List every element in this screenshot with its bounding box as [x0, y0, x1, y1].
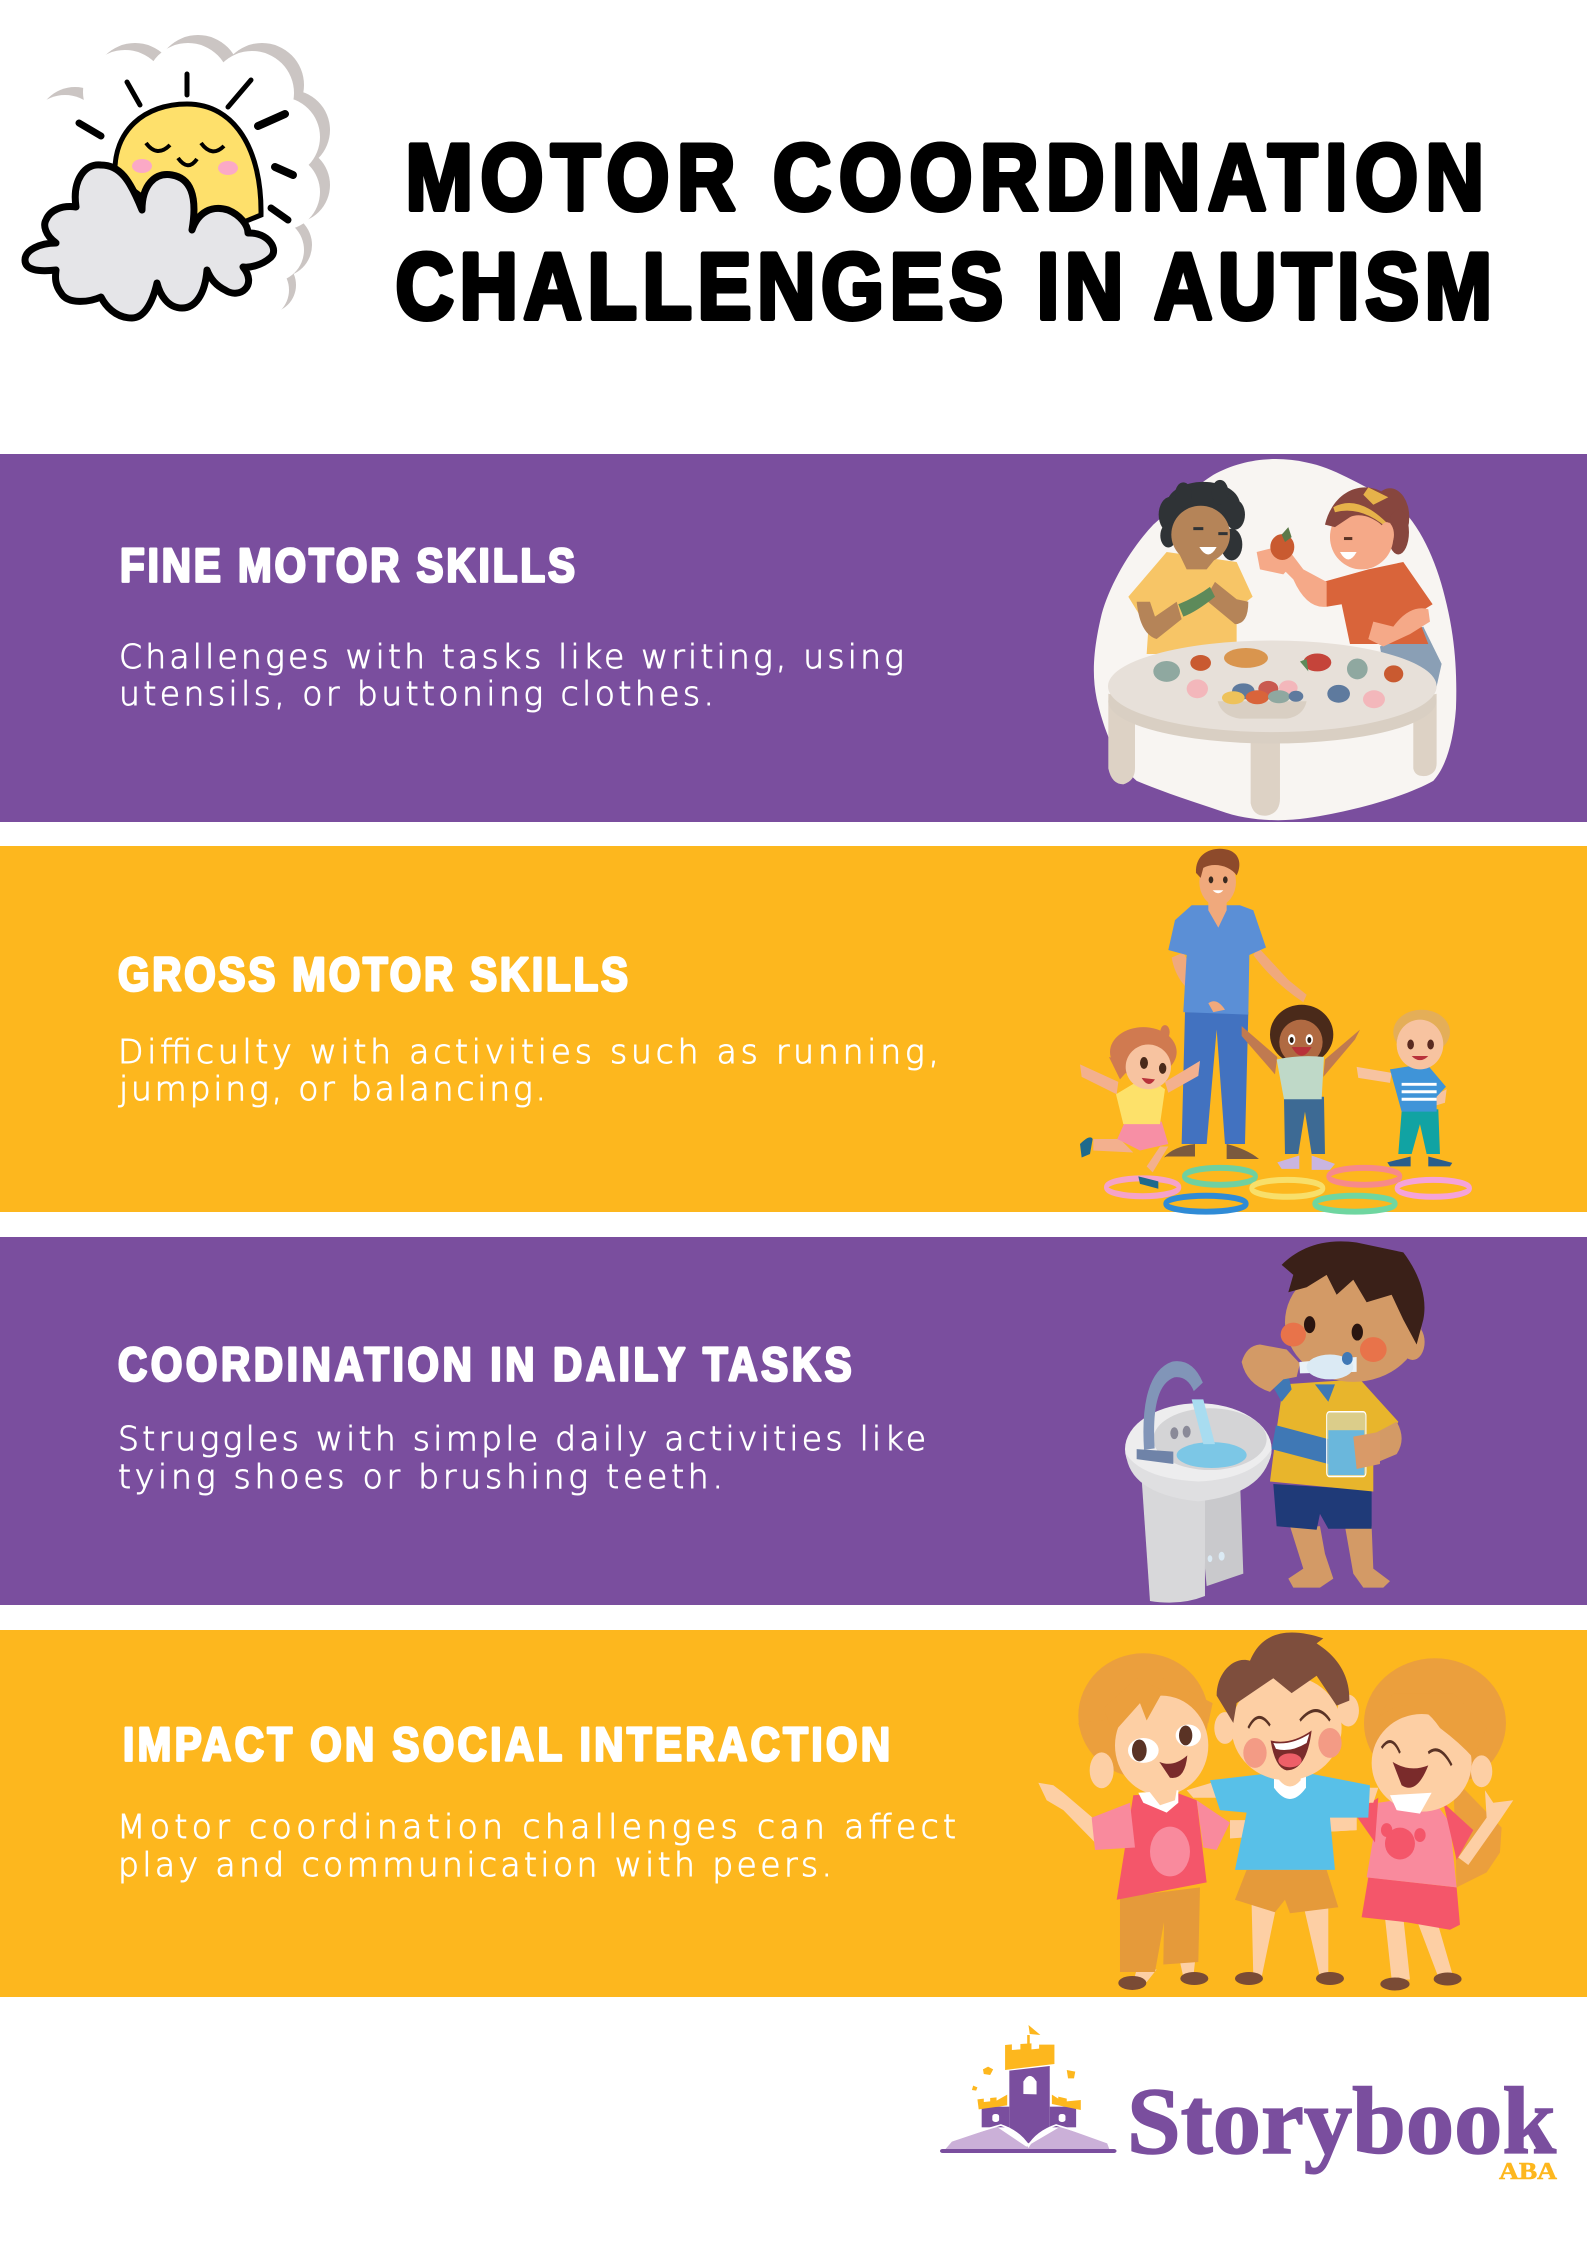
- text block: utensils, or buttoning clothes.: [119, 674, 714, 713]
- therapist: [1164, 849, 1307, 1159]
- icon: sun rays: [79, 74, 293, 220]
- text block: Difficulty with activities such as running,: [118, 1032, 939, 1071]
- child one: [1128, 480, 1253, 654]
- text block: Struggles with simple daily activities like: [118, 1419, 926, 1458]
- clay shapes: [1153, 648, 1403, 719]
- boy with striped shirt: [1357, 1010, 1452, 1166]
- sink: [1125, 1369, 1272, 1603]
- girl in yellow: [1080, 1025, 1200, 1189]
- text block: Challenges with tasks like writing, using: [119, 637, 904, 676]
- illustration: therapist with children and hoops: [1080, 849, 1470, 1212]
- text block: [117, 1807, 956, 1884]
- heading: GROSS MOTOR SKILLS: [118, 949, 628, 1001]
- title: CHALLENGES IN AUTISM: [396, 234, 1492, 339]
- icon: sleepy sun behind cloud sticker: [0, 35, 330, 340]
- text block: Motor coordination challenges can affect: [117, 1807, 956, 1846]
- icon: castle on open book: [940, 2025, 1117, 2153]
- text block: tying shoes or brushing teeth.: [118, 1457, 723, 1496]
- left boy: [1038, 1653, 1230, 1990]
- panel: gross motor skills: [0, 846, 1587, 1212]
- tagline: ABA: [1499, 2159, 1558, 2185]
- wordmark: Storybook: [1127, 2068, 1556, 2174]
- illustration: boy brushing teeth at a sink: [1125, 1241, 1425, 1603]
- panel: impact on social interaction: [0, 1630, 1587, 1997]
- heading: COORDINATION IN DAILY TASKS: [118, 1339, 852, 1391]
- panel: fine motor skills: [0, 454, 1587, 822]
- title: [396, 125, 1492, 339]
- illustration: three happy children: [1038, 1633, 1513, 1990]
- child two: [1257, 487, 1442, 686]
- boy: [1242, 1241, 1425, 1588]
- icon: sun face: [115, 104, 261, 240]
- heading: FINE MOTOR SKILLS: [120, 540, 575, 592]
- middle boy: [1187, 1633, 1378, 1985]
- right girl: [1330, 1658, 1513, 1990]
- logo: Storybook ABA: [940, 2025, 1558, 2185]
- title: MOTOR COORDINATION: [406, 125, 1484, 230]
- girl with curly hair: [1242, 1005, 1360, 1170]
- heading: IMPACT ON SOCIAL INTERACTION: [123, 1719, 890, 1771]
- text block: jumping, or balancing.: [118, 1069, 546, 1108]
- text block: play and communication with peers.: [118, 1845, 832, 1884]
- table: [1108, 641, 1437, 816]
- text block: [118, 1419, 926, 1496]
- icon: cloud: [25, 165, 274, 318]
- hoops: [1106, 1168, 1470, 1212]
- panel: coordination in daily tasks: [0, 1237, 1587, 1605]
- text block: [118, 1032, 939, 1108]
- illustration: children playing with clay at a table: [1094, 459, 1456, 820]
- text block: [119, 637, 904, 713]
